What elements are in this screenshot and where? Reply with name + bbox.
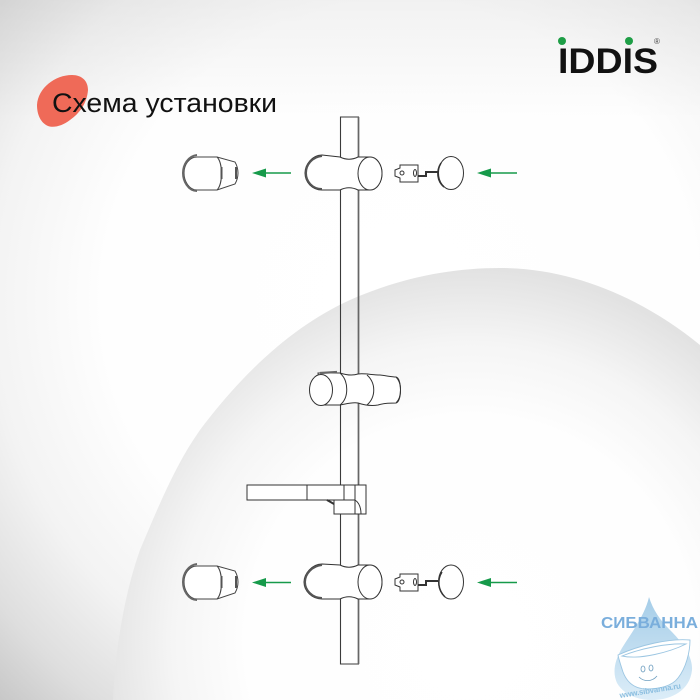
sibvanna watermark [601, 597, 698, 700]
shower rail [340, 117, 358, 664]
soap dish [247, 485, 366, 514]
bathtub face [639, 665, 657, 681]
bottom left arrow [252, 578, 291, 587]
logo dots [558, 37, 633, 45]
top screw and cap [395, 156, 464, 190]
top background shading [0, 0, 700, 120]
bottom end fitting [183, 564, 238, 600]
iddis logo [558, 37, 660, 81]
watermark name: СИБВАННА [601, 615, 698, 632]
bottom right arrow [477, 578, 517, 587]
registered mark: ® [654, 37, 660, 46]
logo wordmark: IDDIS [558, 42, 658, 81]
water drop [615, 597, 692, 700]
watermark url: www.sibvanna.ru [618, 681, 682, 700]
heading: Схема установки [52, 88, 277, 118]
bottom bracket [304, 564, 382, 599]
middle holder [310, 372, 400, 406]
red blob [37, 75, 88, 127]
top right arrow [477, 168, 517, 178]
top left arrow [252, 168, 291, 178]
top end fitting [183, 155, 238, 191]
bottom screw and cap [395, 565, 464, 599]
top bracket [305, 155, 382, 190]
bathtub [618, 640, 690, 689]
curved background shape [113, 268, 700, 700]
title with red blob [37, 75, 277, 127]
